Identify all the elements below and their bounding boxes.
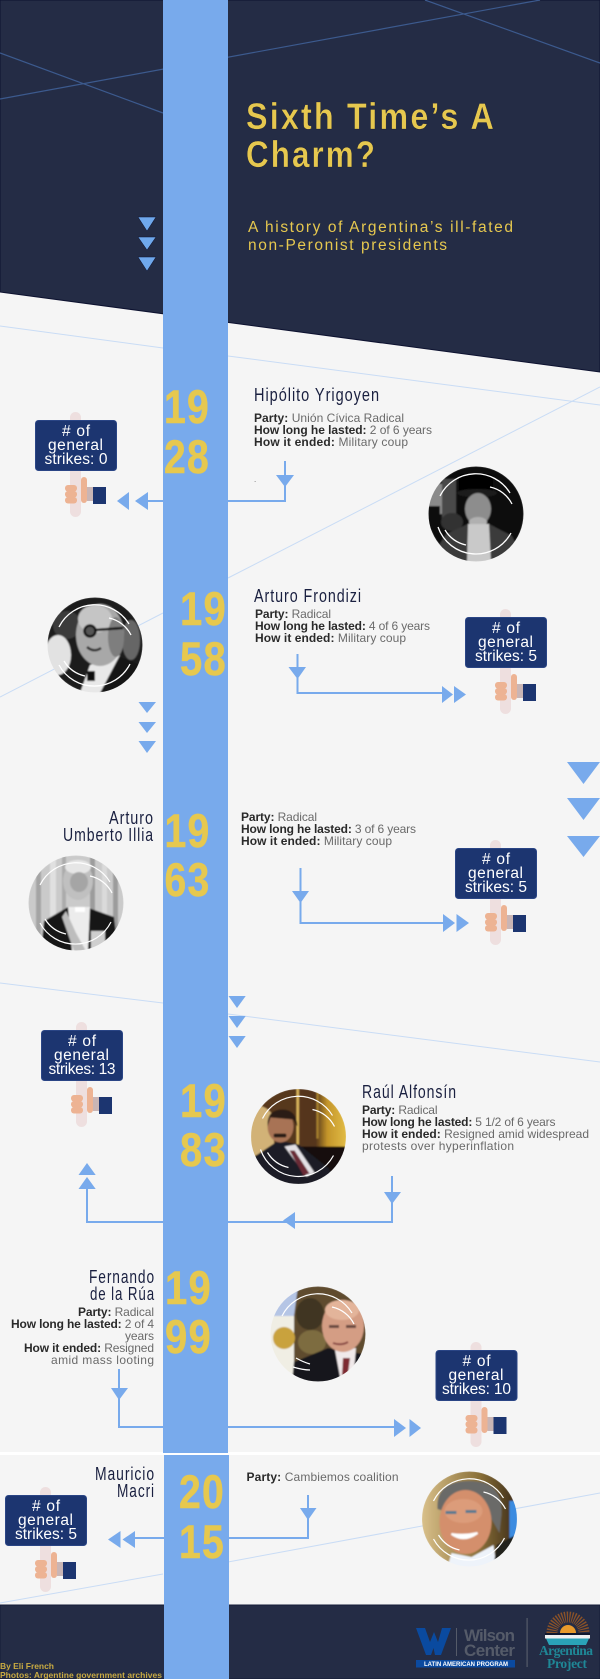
year: 1999: 19 (165, 1261, 212, 1314)
subtitle (248, 219, 513, 254)
name: Illia: Umberto Illia (63, 825, 154, 845)
strikes sign: 13: strikes: 13 (48, 1061, 116, 1078)
logo: Argentina Project: Project (547, 1656, 588, 1671)
details: Alfonsin: How it ended: Resigned amid widespread (362, 1127, 589, 1141)
name: Alfonsin: Raúl Alfonsín (362, 1082, 457, 1102)
photo: Alfonsin (250, 1088, 348, 1184)
strikes sign: 13 (42, 1022, 122, 1127)
name: Macri (95, 1464, 155, 1501)
white separator (0, 1452, 600, 1455)
strikes sign: 5: general (468, 865, 523, 882)
name: Yrigoyen: Hipólito Yrigoyen (254, 385, 380, 405)
name: Illia: Arturo (109, 808, 154, 828)
arrow: Macri (108, 1495, 316, 1548)
logo: Wilson Center: LATIN AMERICAN PROGRAM (424, 1661, 508, 1668)
details: de la Rua (11, 1305, 154, 1367)
photo: Yrigoyen (428, 466, 524, 562)
strikes sign: 5: strikes: 5 (15, 1526, 77, 1543)
strikes sign: 10: strikes: 10 (442, 1381, 511, 1398)
strikes sign: 13: # of (68, 1033, 97, 1050)
strikes sign: 5: general (478, 634, 533, 651)
year: 1983 (180, 1074, 227, 1176)
name: Frondizi: Arturo Frondizi (254, 586, 362, 606)
icon: down triangles 1958 (138, 702, 156, 753)
divider (526, 1618, 528, 1667)
year: 2015 (179, 1465, 225, 1568)
year: 2015: 15 (179, 1515, 225, 1568)
strikes sign: 10: # of (462, 1353, 491, 1370)
subtitle: A history of Argentina’s ill-fated (248, 219, 513, 236)
details: Macri: Party: Cambiemos coalition (246, 1470, 398, 1484)
logo: Argentina Project (539, 1617, 593, 1671)
photo: Macri (422, 1471, 518, 1567)
details: Yrigoyen: How long he lasted: 2 of 6 years (254, 423, 432, 437)
year: 1958: 58 (180, 632, 227, 685)
arrow: Alfonsin (78, 1163, 401, 1229)
strikes sign: 5: general (18, 1512, 73, 1529)
details: Illia: How long he lasted: 3 of 6 years (241, 822, 416, 836)
strikes sign: 0: strikes: 0 (44, 451, 108, 468)
strikes sign: 5: strikes: 5 (465, 879, 527, 896)
credits (0, 1661, 162, 1679)
year: 2015: 20 (179, 1465, 225, 1518)
details: Illia (241, 810, 416, 848)
strikes sign: 5 (456, 840, 536, 945)
details: de la Rua: years (125, 1329, 154, 1343)
subtitle: non-Peronist presidents (248, 237, 447, 254)
title (246, 95, 496, 175)
year: 1963 (164, 804, 210, 906)
strikes sign: 5: strikes: 5 (475, 648, 537, 665)
timeline strip (163, 0, 229, 1679)
logo: Wilson Center: Wilson (464, 1626, 515, 1645)
name: de la Rua: de la Rúa (90, 1284, 155, 1304)
strikes sign: 5: # of (32, 1498, 61, 1515)
strikes sign: 10: general (448, 1367, 504, 1384)
arrow: Illia (292, 868, 469, 932)
header panel (0, 0, 600, 372)
icon: large down triangles (567, 762, 600, 857)
year: 1983: 83 (180, 1123, 227, 1176)
name: Illia (63, 808, 154, 845)
details: Frondizi: Party: Radical (255, 607, 331, 621)
strikes sign: 5 (6, 1487, 86, 1592)
year: 1928 (164, 380, 210, 483)
logo: Argentina Project: Argentina (539, 1643, 593, 1658)
year: 1999: 99 (165, 1310, 212, 1363)
strikes sign: 13: general (54, 1047, 109, 1064)
name: de la Rua: Fernando (89, 1267, 155, 1287)
photo: Frondizi (45, 597, 143, 693)
details: Alfonsin: protests over hyperinflation (362, 1139, 514, 1153)
year: 1958 (180, 582, 227, 685)
details: de la Rua: How long he lasted: 2 of 4 (11, 1317, 154, 1331)
strikes sign: 0: # of (62, 423, 91, 440)
icon: header down triangles (138, 217, 156, 271)
name: Macri: Macri (117, 1481, 155, 1501)
icon: down triangles 1983 (228, 996, 246, 1048)
strikes sign: 5: # of (482, 851, 511, 868)
year: 1963: 63 (164, 853, 210, 906)
logo: Wilson Center (416, 1626, 515, 1668)
year: 1999 (165, 1261, 212, 1363)
details: Yrigoyen (254, 411, 432, 484)
year: 1928: 19 (164, 380, 210, 433)
year: 1928: 28 (164, 430, 210, 483)
strikes sign: 0 (36, 412, 116, 517)
name: de la Rua (89, 1267, 155, 1304)
strikes sign: 5 (466, 609, 546, 714)
details: Yrigoyen: . (254, 475, 256, 484)
background lines (0, 326, 600, 1603)
photo: de la Rua (270, 1286, 366, 1382)
details: Frondizi (255, 607, 430, 645)
strikes sign: 10 (436, 1342, 517, 1447)
strikes sign: 5: # of (492, 620, 521, 637)
details: Frondizi: How long he lasted: 4 of 6 years (255, 619, 430, 633)
title: Charm? (246, 133, 377, 175)
details: Alfonsin: Party: Radical (362, 1103, 438, 1117)
details: Illia: Party: Radical (241, 810, 317, 824)
year: 1983: 19 (180, 1074, 227, 1127)
footer panel (0, 1605, 600, 1679)
photo: Illia (28, 855, 124, 951)
details: Yrigoyen: How it ended: Military coup (254, 435, 408, 449)
details: Yrigoyen: Party: Unión Cívica Radical (254, 411, 404, 425)
details: Illia: How it ended: Military coup (241, 834, 392, 848)
details: de la Rua: Party: Radical (78, 1305, 154, 1319)
arrow: Yrigoyen (117, 461, 294, 510)
credits: By Eli French (0, 1661, 54, 1671)
details: Frondizi: How it ended: Military coup (255, 631, 406, 645)
details: de la Rua: amid mass looting (51, 1353, 154, 1367)
details: de la Rua: How it ended: Resigned (24, 1341, 154, 1355)
arrow: Frondizi (288, 654, 466, 703)
details: Alfonsin: How long he lasted: 5 1/2 of 6 years (362, 1115, 556, 1129)
name: Macri: Mauricio (95, 1464, 155, 1484)
year: 1963: 19 (164, 804, 210, 857)
strikes sign: 0: general (48, 437, 103, 454)
logo: Wilson Center: Center (464, 1641, 515, 1660)
year: 1958: 19 (180, 582, 227, 635)
title: Sixth Time’s A (246, 95, 496, 137)
arrow: de la Rua (111, 1369, 421, 1437)
details: Alfonsin (362, 1103, 589, 1153)
